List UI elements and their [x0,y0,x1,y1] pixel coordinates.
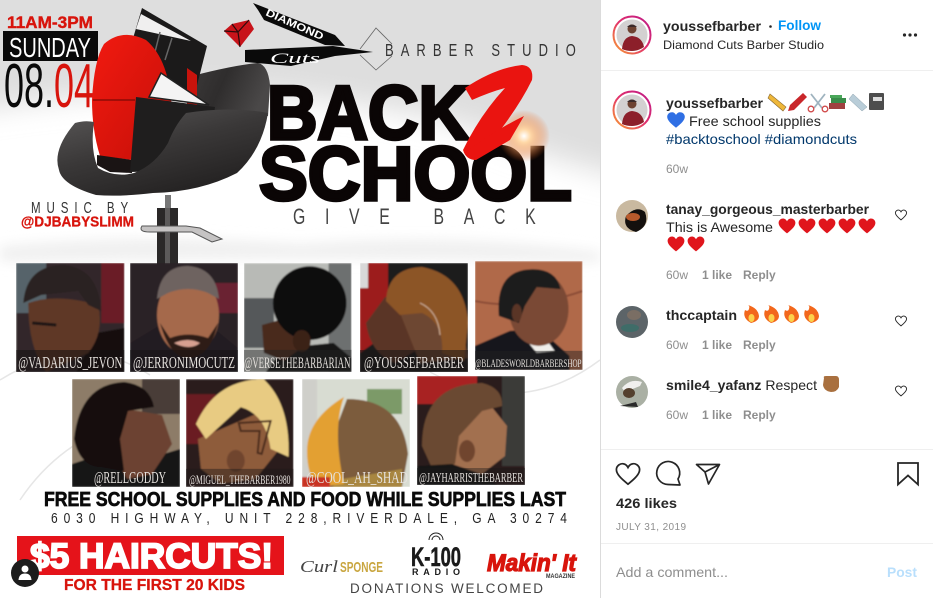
panel: right column background [600,0,933,598]
comment: tanay_gorgeous_masterbarber [616,200,907,282]
column border [600,0,601,598]
decorative diamond outline [360,28,392,70]
caption text: Free school supplies [689,113,821,129]
icon: bookmark [898,463,918,484]
comment meta: 1 like [702,268,732,282]
logo: makin it magazine: Makin' It [487,550,577,577]
icon: like comment [895,386,907,396]
caption block [614,92,884,176]
comment input: Add a comment... [616,564,728,580]
photo: vadarius_jevon [16,263,124,372]
icon: like comment [895,210,907,220]
avatar [616,306,648,338]
like count: 426 likes [616,495,677,511]
emoji row [768,93,884,112]
panel: poster [0,0,660,598]
emoji: flames [744,305,819,323]
chair back [185,63,270,120]
chair stand [141,195,222,265]
emoji: blue heart [667,112,685,128]
text: barber studio: BARBER STUDIO [385,41,576,61]
logo: makin it magazine: MAGAZINE [546,573,576,580]
red backpack [92,35,197,173]
subtitle: give back: GIVE BACK [293,206,536,230]
text: donations welcomed: DONATIONS WELCOMED [350,581,543,596]
photo: jayharristhebarber [417,376,525,485]
folder and notebook [130,73,215,172]
icon: share arrow [696,464,720,484]
date: 08.04: 08.04 [4,52,94,121]
photo: bladesworldbarbershop [475,261,582,370]
poster grey backdrop [0,0,660,185]
post header [614,16,917,54]
icon: comment bubble [657,462,680,485]
comment meta: 60w [666,268,688,282]
comment: tanay_gorgeous_masterbarber: tanay_gorgeous_masterbarber [666,201,870,217]
logo: k-100 radio: RADIO [412,567,460,577]
emoji: raised fist [823,376,839,392]
caption author: youssefbarber [666,95,764,111]
photo: miguel_thebarber [186,379,294,487]
location: Diamond Cuts Barber Studio [663,38,824,52]
comment meta: Reply [743,338,776,352]
avatar: youssefbarber [614,16,650,54]
comment: tanay_gorgeous_masterbarber: This is Awesome [666,219,773,235]
avatar [616,376,648,408]
comment: thccaptain [616,305,907,352]
comment meta: Reply [743,408,776,422]
icon: barber chair with backpack [57,8,270,265]
music credit [21,198,134,230]
account name: youssefbarber [663,18,762,34]
comment meta: 60w [666,338,688,352]
photo: rellgoddy [72,379,180,487]
photo: jerronimocutz [130,263,238,372]
time: 11AM-3PM: 11AM-3PM [7,13,93,32]
post date: JULY 31, 2019 [616,522,686,533]
logo: curl sponge: SPONGE [340,559,383,576]
title: back 2 school: BACK [267,71,469,156]
logo: diamond cuts razor: Cuts [270,51,320,67]
logo: curl sponge: Curl [300,557,338,576]
post button: Post [887,564,917,580]
comment: smile4_yafanz [616,376,907,422]
photo: cool_ah_shad [302,379,410,487]
action bar [616,462,918,485]
avatar [616,200,648,232]
title: back 2 school [259,65,572,217]
timestamp: 60w [666,162,688,176]
icon: like comment [895,316,907,326]
comment meta: 1 like [702,408,732,422]
comment: thccaptain: thccaptain [666,307,737,323]
hashtags: #backtoschool #diamondcuts [666,131,857,147]
banner: $5 haircuts: $5 HAIRCUTS! [30,537,273,576]
avatar: caption [614,92,650,128]
comment meta: Reply [743,268,776,282]
title: back 2 school: SCHOOL [259,132,572,217]
photo: versethebarbarian [244,263,352,372]
photo: youssefbarber [360,263,468,372]
more menu [903,33,917,37]
icon: red diamond [224,20,254,47]
address: 6030 HIGHWAY, UNIT 228,RIVERDALE, GA 30274 [51,510,567,526]
icon: tagged user badge [11,559,39,587]
comment: smile4_yafanz: smile4_yafanz Respect [666,377,817,393]
logo: k-100 radio: K-100 [411,542,461,572]
logo: curl sponge [300,557,383,576]
logo: k-100 radio [411,533,461,577]
logo: diamond cuts razor: DIAMOND [264,7,326,43]
text: first 20 kids: FOR THE FIRST 20 KIDS [64,577,245,594]
razor lower band [245,46,373,66]
comment meta: 1 like [702,338,732,352]
razor upper band [253,3,345,46]
clipboard [126,8,207,105]
music credit: @DJBABYSLIMM [21,214,134,230]
day label: SUNDAY: SUNDAY [9,32,91,63]
headline: free school supplies: FREE SCHOOL SUPPLIES AND FOOD WHILE SUPPLIES LAST [44,489,566,511]
logo: diamond cuts razor [224,3,373,67]
comment meta: 60w [666,408,688,422]
icon: like [616,464,640,484]
follow button: Follow [778,17,821,33]
emoji: red hearts [668,219,875,251]
music credit: MUSIC BY [31,198,128,216]
chair seat shell [57,110,268,196]
